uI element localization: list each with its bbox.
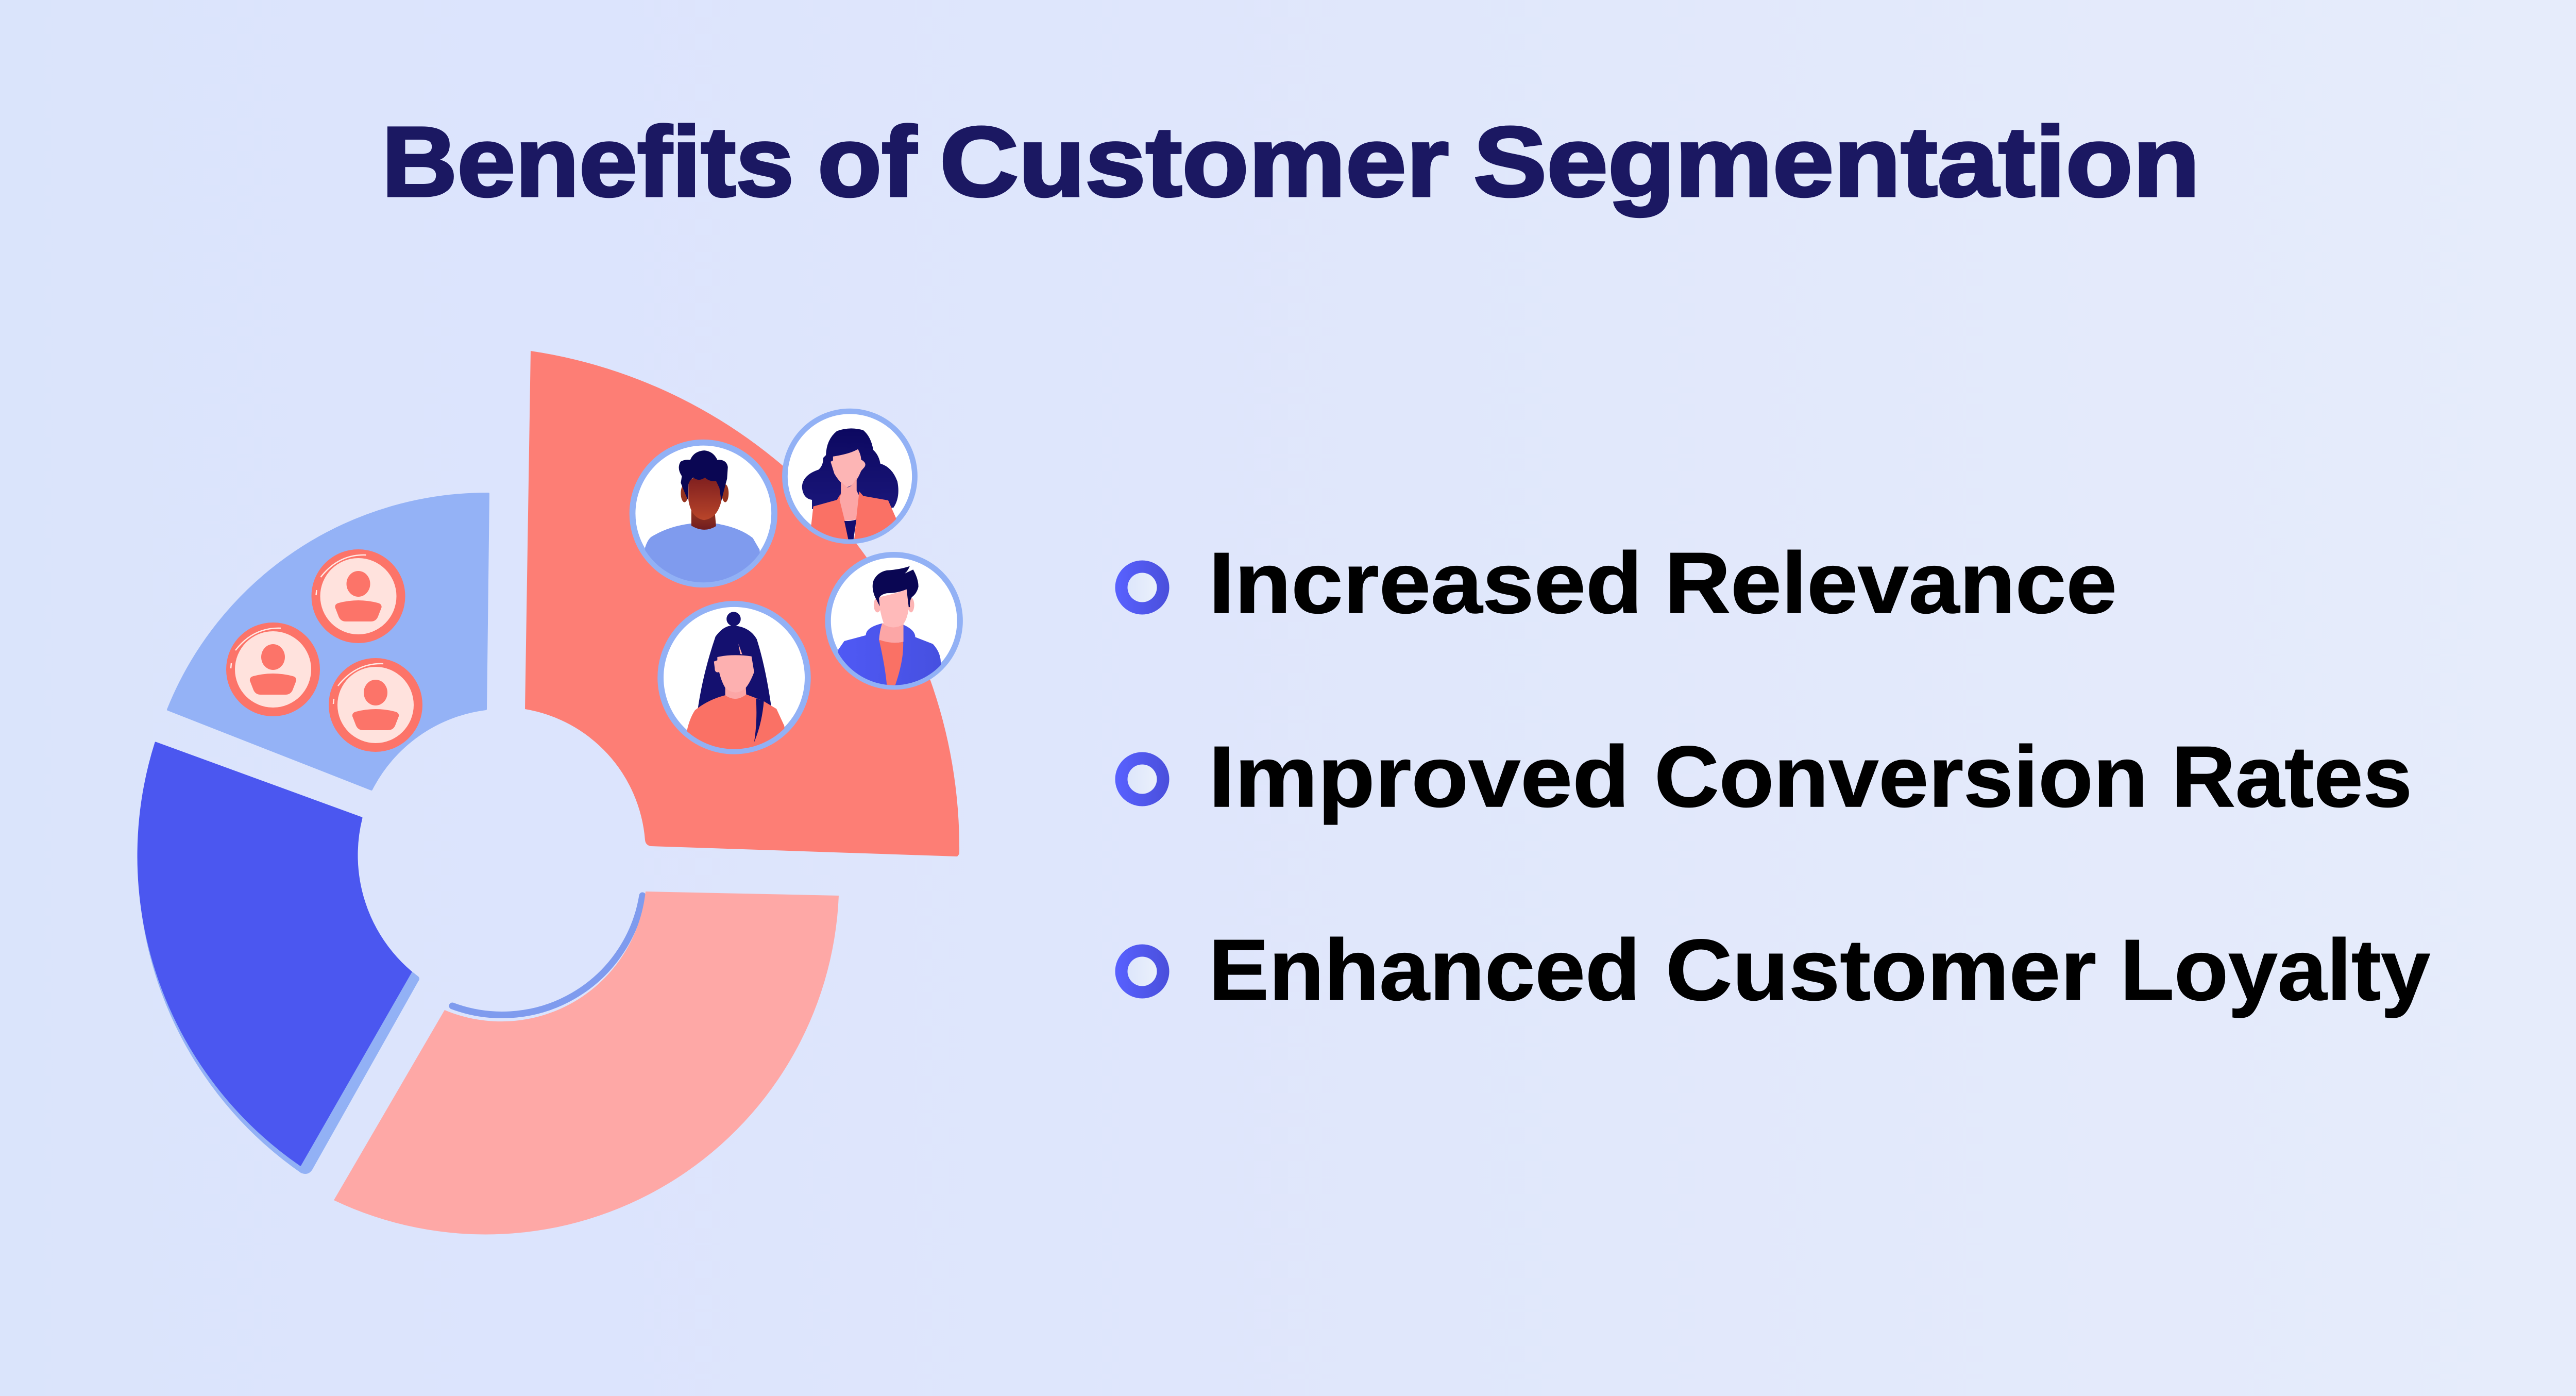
bullet: increased relevance: [1115, 561, 1170, 614]
text: improved conversion rates: Improved: [1209, 728, 1630, 825]
text: improved conversion rates: [1209, 728, 2412, 825]
icon: customer badge left: [226, 623, 320, 716]
title: Customer: [940, 106, 1449, 217]
segment: light pink with blue inner rim: [334, 892, 839, 1234]
text: improved conversion rates: Conversion: [1654, 728, 2148, 825]
segment: dark blue with light shadow: [138, 743, 419, 1174]
text: enhanced customer loyalty: Loyalty: [2120, 921, 2430, 1018]
segment: light blue, with three customer icons: [168, 494, 488, 789]
title: Benefits: [382, 106, 794, 217]
avatar: man with curly hair: [633, 443, 774, 589]
text: increased relevance: Increased: [1209, 534, 1642, 631]
avatar: woman with wavy hair: [785, 411, 915, 542]
text: improved conversion rates: Rates: [2172, 728, 2412, 825]
segment: coral, with four customer avatars: [525, 351, 960, 856]
text: enhanced customer loyalty: Enhanced: [1209, 921, 1640, 1018]
text: increased relevance: Relevance: [1665, 534, 2117, 631]
bullet: enhanced customer loyalty: [1115, 944, 1170, 999]
bullet: improved conversion rates: [1115, 752, 1170, 806]
avatar: woman with long hair and bun: [660, 604, 808, 752]
text: enhanced customer loyalty: [1209, 921, 2430, 1018]
icon: customer badge right: [329, 658, 422, 752]
title: [382, 106, 2200, 217]
text: enhanced customer loyalty: Customer: [1666, 921, 2096, 1018]
title: of: [818, 106, 917, 217]
text: increased relevance: [1209, 534, 2117, 631]
title: Segmentation: [1473, 106, 2200, 217]
segmented donut chart: [138, 351, 960, 1234]
avatar: man with swept hair and blue jacket: [828, 555, 960, 689]
icon: customer badge top: [311, 549, 405, 643]
